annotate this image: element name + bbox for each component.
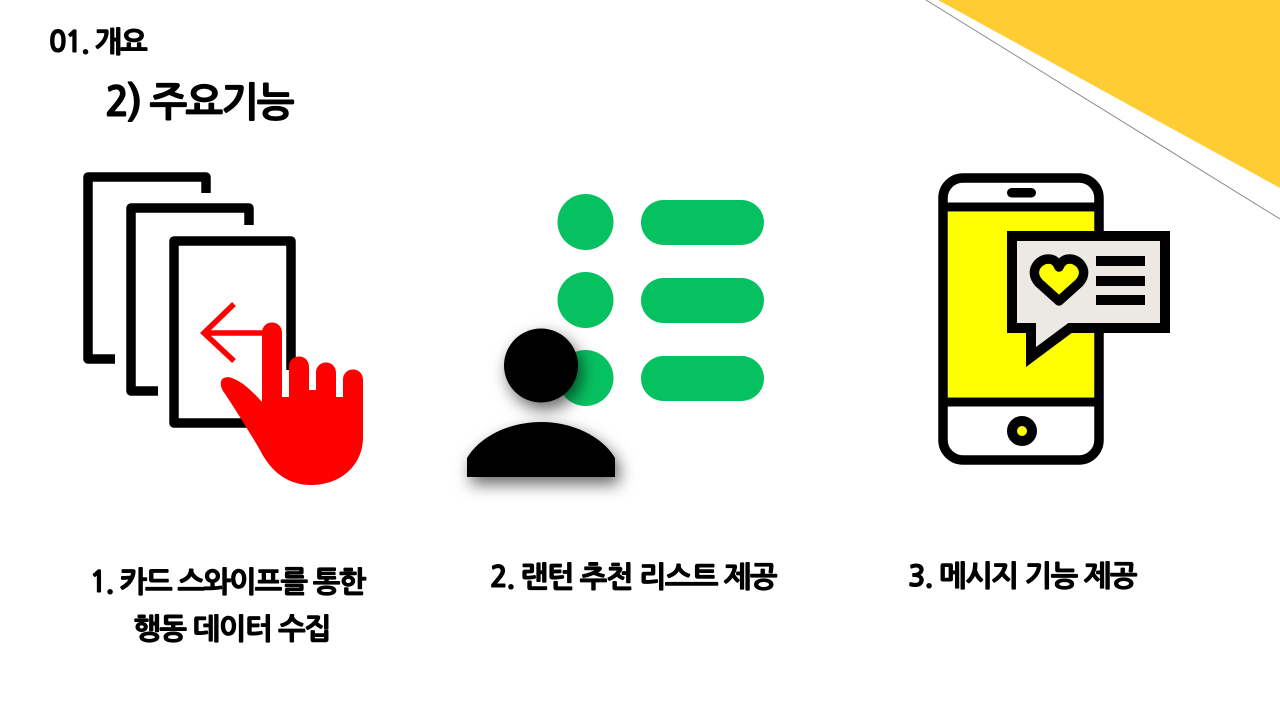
caption 1: 행동 데이터 수집 <box>133 616 331 644</box>
caption 3: 3. 메시지 기능 제공 <box>908 563 1136 591</box>
caption 1 <box>89 566 366 644</box>
caption 2: 2. 랜턴 추천 리스트 제공 <box>490 564 776 592</box>
sub heading: 2) 주요기능 <box>105 82 293 122</box>
caption 1: 1. 카드 스와이프를 통한 <box>89 569 365 597</box>
section heading: 01. 개요 <box>49 29 146 57</box>
